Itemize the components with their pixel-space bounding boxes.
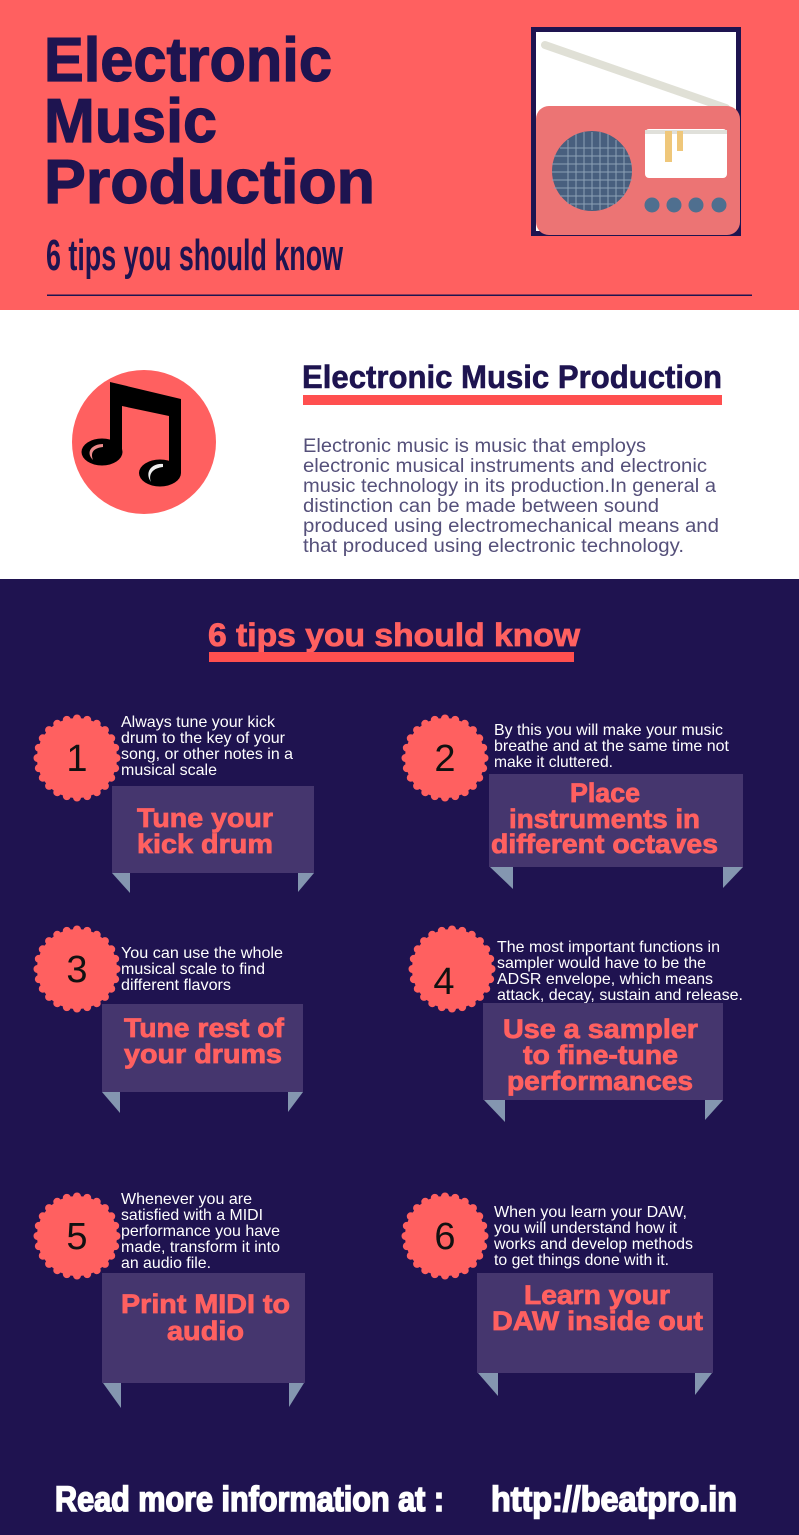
tip 5 description: satisfied with a MIDI bbox=[121, 1207, 263, 1224]
heading: Electronic Music Production bbox=[302, 359, 722, 395]
tip 3 banner bbox=[102, 1004, 303, 1113]
tip 4 bbox=[412, 929, 743, 1122]
tip 4 description bbox=[497, 939, 743, 1004]
tip 5 description: made, transform it into bbox=[121, 1239, 280, 1256]
tip 1 banner: kick drum bbox=[137, 829, 273, 859]
tip 1 description: musical scale bbox=[121, 762, 217, 779]
tip 6 banner: Learn your bbox=[524, 1280, 671, 1310]
tip 2 bbox=[405, 718, 743, 889]
icon: radio bbox=[534, 30, 740, 235]
tip 2 banner bbox=[489, 774, 743, 889]
tip 2 banner: instruments in bbox=[509, 804, 700, 834]
badge 4 bbox=[412, 929, 492, 1009]
tip 2 description: By this you will make your music bbox=[494, 722, 723, 739]
tip 2 description: breathe and at the same time not bbox=[494, 738, 730, 755]
badge 5 bbox=[37, 1196, 117, 1276]
title: Music bbox=[44, 87, 217, 156]
text block: description: distinction can be made between sound bbox=[303, 496, 659, 517]
tip 4 banner: to fine-tune bbox=[523, 1040, 678, 1070]
text block: description: Electronic music is music that employs bbox=[303, 436, 646, 457]
tip 3 description: different flavors bbox=[121, 977, 231, 994]
tip 6 banner bbox=[477, 1273, 713, 1396]
tip 6 banner: DAW inside out bbox=[492, 1306, 703, 1336]
tip 3 bbox=[37, 929, 303, 1113]
badge 5: 5 bbox=[66, 1216, 88, 1258]
tip 5 bbox=[37, 1191, 305, 1408]
tip 1 bbox=[37, 714, 314, 893]
title: Production bbox=[44, 148, 375, 217]
tip 5 banner bbox=[102, 1273, 305, 1408]
tip 3 description bbox=[121, 945, 283, 994]
tip 2 description: make it cluttered. bbox=[494, 754, 613, 771]
badge 6: 6 bbox=[434, 1216, 456, 1258]
subtitle: 6 tips you should know bbox=[46, 231, 343, 280]
badge 3: 3 bbox=[66, 949, 88, 991]
text block: description: music technology in its production.In general a bbox=[303, 476, 716, 497]
panel: introduction bbox=[0, 310, 799, 579]
tip 6 description: When you learn your DAW, bbox=[494, 1204, 687, 1221]
text block: description: that produced using electronic technology. bbox=[303, 536, 684, 557]
tip 6 description: to get things done with it. bbox=[494, 1252, 669, 1269]
tip 6 description bbox=[493, 1204, 693, 1269]
tip 4 banner: performances bbox=[507, 1066, 693, 1096]
tip 6 description: you will understand how it bbox=[494, 1220, 678, 1237]
tip 3 description: You can use the whole bbox=[121, 945, 283, 962]
tip 4 banner: Use a sampler bbox=[503, 1014, 699, 1044]
footer call to action: Read more information at : bbox=[55, 1480, 444, 1519]
tip 5 description bbox=[121, 1191, 280, 1272]
badge 2 bbox=[405, 718, 485, 798]
badge 3 bbox=[37, 929, 117, 1009]
tip 1 banner bbox=[112, 786, 314, 893]
text block: description: electronic musical instruments and electronic bbox=[303, 456, 707, 477]
tip 4 description: attack, decay, sustain and release. bbox=[497, 987, 743, 1004]
panel: header bbox=[0, 0, 799, 310]
tip 4 banner bbox=[483, 1003, 723, 1122]
tip 6 bbox=[405, 1196, 713, 1396]
tip 3 description: musical scale to find bbox=[121, 961, 265, 978]
tip 5 banner: Print MIDI to bbox=[121, 1289, 290, 1319]
footer call to action: http://beatpro.in bbox=[491, 1480, 737, 1519]
tip 5 description: an audio file. bbox=[121, 1255, 211, 1272]
tip 3 banner: Tune rest of bbox=[124, 1013, 285, 1043]
tip 1 description: song, or other notes in a bbox=[121, 746, 293, 763]
panel: tips bbox=[0, 579, 799, 1535]
tip 1 description: drum to the key of your bbox=[121, 730, 286, 747]
tip 1 banner: Tune your bbox=[137, 803, 274, 833]
tip 5 description: performance you have bbox=[121, 1223, 280, 1240]
text block: description: produced using electromechanical means and bbox=[303, 516, 719, 537]
icon: music note bbox=[72, 370, 216, 514]
title bbox=[44, 26, 375, 217]
tip 2 banner: Place bbox=[570, 778, 640, 808]
tip 4 description: sampler would have to be the bbox=[497, 955, 706, 972]
heading: tips: 6 tips you should know bbox=[208, 617, 580, 653]
tip 1 description bbox=[121, 714, 293, 779]
tip 2 description bbox=[494, 722, 730, 771]
footer call to action bbox=[55, 1480, 737, 1519]
badge 2: 2 bbox=[434, 738, 456, 780]
tip 4 description: ADSR envelope, which means bbox=[497, 971, 713, 988]
tip 5 banner: audio bbox=[167, 1316, 244, 1346]
tip 1 description: Always tune your kick bbox=[121, 714, 276, 731]
tip 6 description: works and develop methods bbox=[493, 1236, 693, 1253]
badge 4: 4 bbox=[433, 961, 455, 1003]
tip 5 description: Whenever you are bbox=[121, 1191, 252, 1208]
badge 1 bbox=[37, 718, 117, 798]
tip 3 banner: your drums bbox=[124, 1039, 282, 1069]
text block: description bbox=[303, 436, 719, 557]
tip 4 description: The most important functions in bbox=[497, 939, 720, 956]
title: Electronic bbox=[44, 26, 332, 95]
badge 1: 1 bbox=[66, 738, 88, 780]
tip 2 banner: different octaves bbox=[491, 829, 718, 859]
badge 6 bbox=[405, 1196, 485, 1276]
